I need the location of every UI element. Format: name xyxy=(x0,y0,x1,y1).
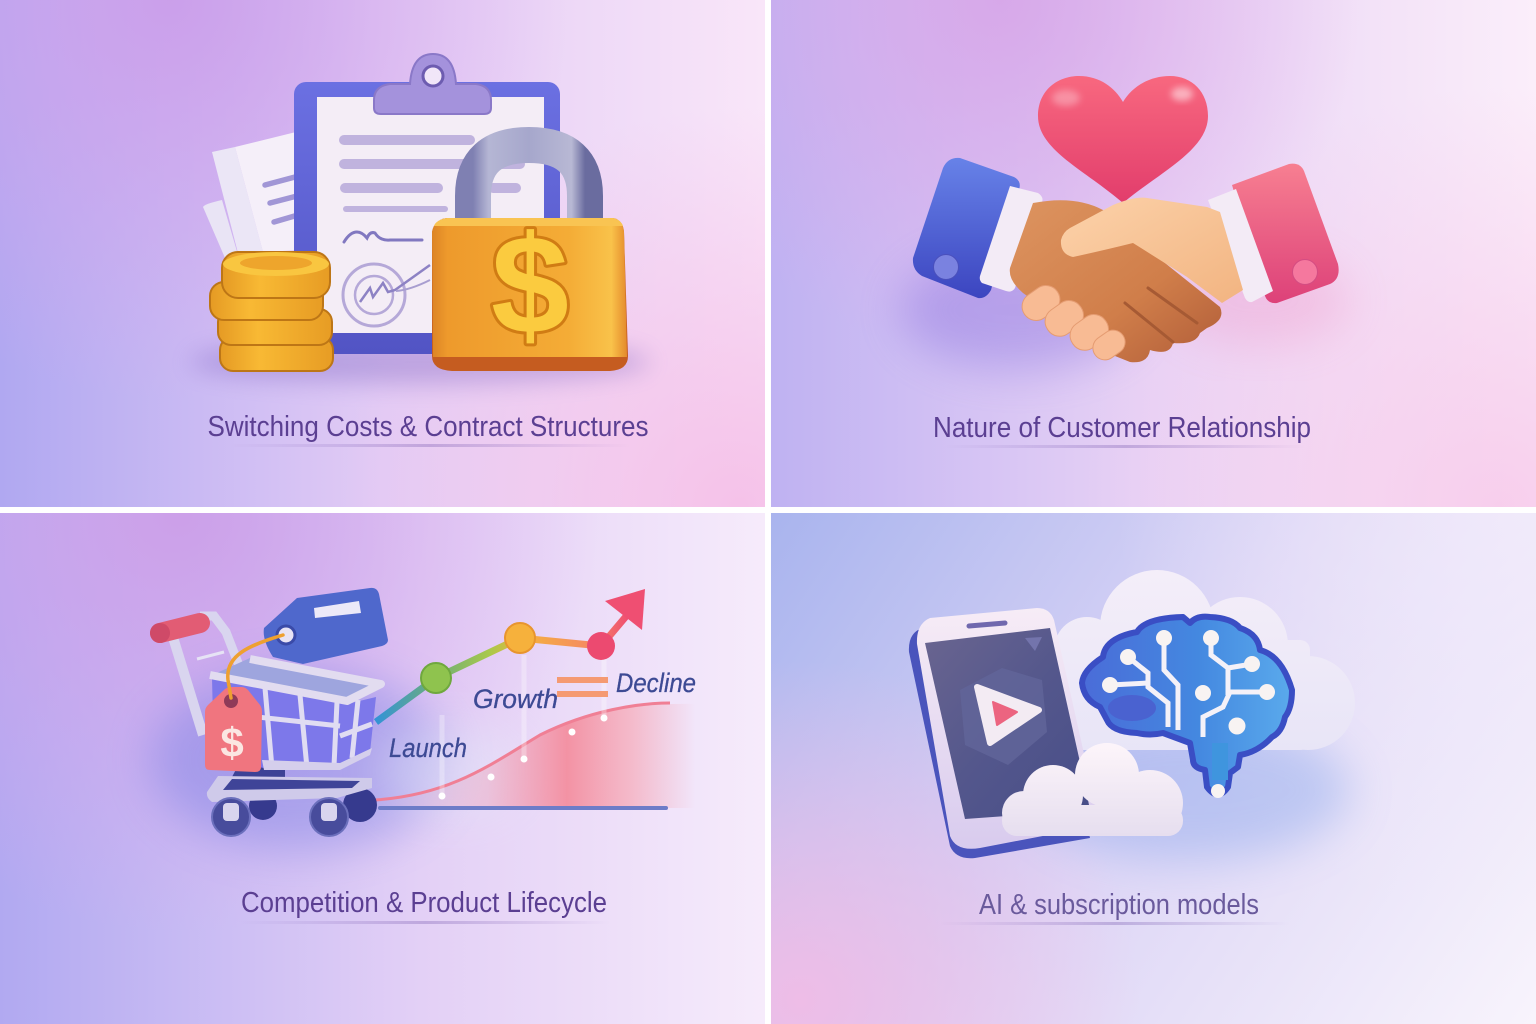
icon: papers behind clipboard xyxy=(203,132,302,258)
icon: stack of gold coins xyxy=(210,252,333,371)
label: decline: Decline xyxy=(616,668,696,698)
chart: lifecycle growth line with arrow xyxy=(376,589,645,722)
icon: front cloud xyxy=(1002,743,1183,836)
chart: lifecycle area curve xyxy=(375,655,695,808)
icon: shirt cuffs xyxy=(980,186,1273,302)
icon: background cloud xyxy=(1054,570,1355,750)
icon: shopping cart xyxy=(150,616,382,836)
icon: blue price tag xyxy=(264,588,388,664)
label: launch: Launch xyxy=(389,733,467,763)
caption: customer relationship: Nature of Customer Relationship xyxy=(933,412,1311,444)
icon: red dollar tag xyxy=(205,635,283,772)
icon: smartphone with play button xyxy=(909,608,1100,858)
panel: switching costs and contract structures xyxy=(0,0,765,507)
panel: competition and product lifecycle xyxy=(0,513,765,1024)
icon: left blue cuff xyxy=(913,158,1020,298)
label: growth: Growth xyxy=(473,684,558,714)
caption: AI and subscription models xyxy=(977,893,1260,925)
caption: switching costs: Switching Costs & Contract Structures xyxy=(208,411,648,443)
icon: equals marks xyxy=(557,677,608,697)
caption: competition and product lifecycle: Competition & Product Lifecycle xyxy=(241,887,607,919)
icon: clasped hands xyxy=(1010,198,1243,365)
panel: AI and subscription models xyxy=(771,513,1536,1024)
panel: nature of customer relationship xyxy=(771,0,1536,507)
icon: circuit brain xyxy=(1082,617,1292,798)
icon: padlock with dollar sign xyxy=(432,145,628,371)
icon: red dollar tag: $ xyxy=(220,719,244,766)
icon: clipboard with contract xyxy=(294,54,560,354)
caption: competition and product lifecycle xyxy=(242,891,606,924)
caption: AI and subscription models: AI & subscription models xyxy=(979,889,1259,921)
icon: right red cuff xyxy=(1232,164,1339,303)
icon: padlock with dollar sign: $ xyxy=(491,206,569,363)
icon: heart xyxy=(1038,76,1208,203)
